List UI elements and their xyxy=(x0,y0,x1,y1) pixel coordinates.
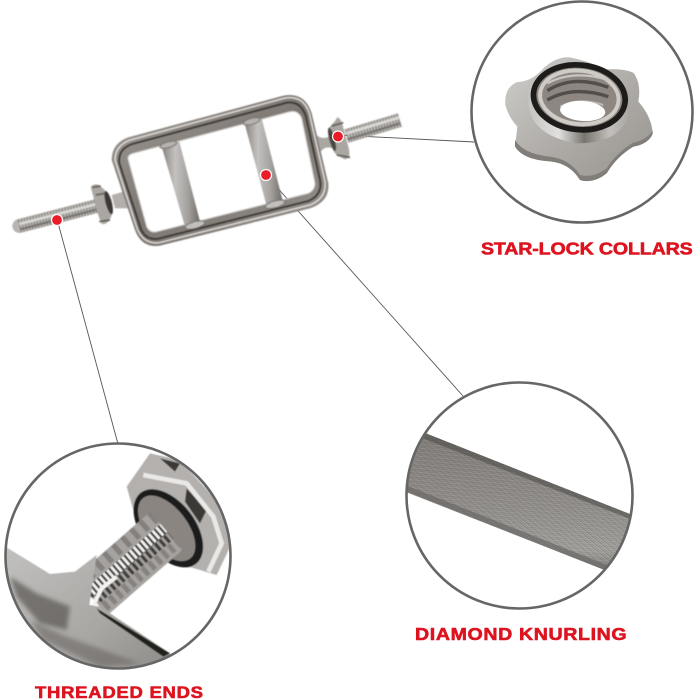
leader line: star-lock collars xyxy=(338,135,474,142)
panel: threaded ends xyxy=(0,444,233,683)
collar xyxy=(127,453,233,575)
panel: star-lock collar xyxy=(472,2,692,222)
callout dot: threaded end xyxy=(52,214,62,226)
right threaded end xyxy=(347,117,400,139)
left collar xyxy=(91,184,115,224)
callout dot: knurled grip xyxy=(260,170,272,180)
right grip bar xyxy=(243,116,286,210)
left stub xyxy=(112,192,128,208)
circle frame xyxy=(406,382,632,608)
knurled bar photo xyxy=(408,434,630,570)
right stub xyxy=(315,133,333,153)
leader line: diamond knurling xyxy=(266,175,463,396)
label: star-lock collars: STAR-LOCK COLLARS xyxy=(481,238,693,258)
leader line: threaded ends xyxy=(57,219,118,444)
right collar xyxy=(326,117,350,159)
callout dot: collar xyxy=(332,131,344,142)
product: tricep bar xyxy=(19,95,400,246)
label: diamond knurling: DIAMOND KNURLING xyxy=(415,624,627,644)
circle frame xyxy=(6,444,230,668)
left grip bar xyxy=(159,140,206,231)
frame junction xyxy=(6,547,170,668)
collar photo xyxy=(505,57,653,181)
threaded end photo xyxy=(6,453,229,668)
left threaded end xyxy=(19,204,97,229)
frame xyxy=(112,95,328,246)
panel: diamond knurling xyxy=(398,382,640,608)
threaded shaft xyxy=(90,513,182,614)
circle frame xyxy=(472,2,692,222)
frame highlights xyxy=(115,98,325,243)
